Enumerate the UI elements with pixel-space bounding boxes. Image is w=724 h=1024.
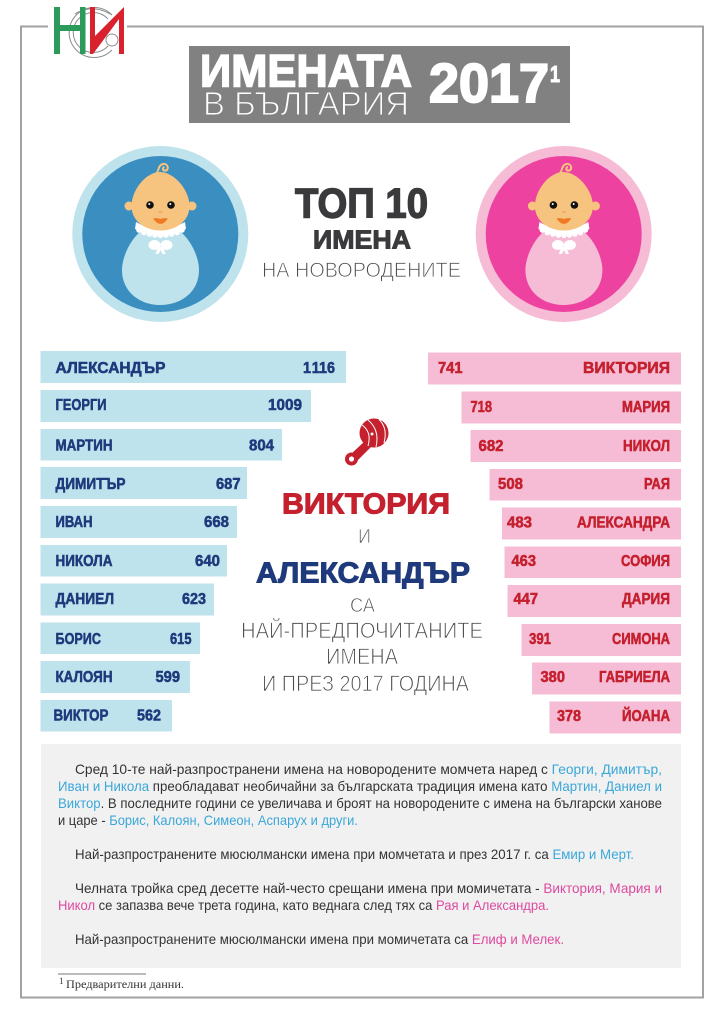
bar chart: girls: 718 <box>470 399 492 416</box>
bar chart: girls: ЙОАНА <box>622 707 670 725</box>
callout: most preferred names: ИМЕНА <box>326 644 398 669</box>
bar chart: girls: МАРИЯ <box>622 399 670 416</box>
bar chart: boys: АЛЕКСАНДЪР <box>56 360 166 377</box>
bar chart: girls: 741 <box>438 360 463 377</box>
bar chart: boys: КАЛОЯН <box>56 669 112 686</box>
bar chart: girls: ГАБРИЕЛА <box>599 669 670 686</box>
bar chart: boys: 668 <box>204 514 229 531</box>
bar chart: boys: ГЕОРГИ <box>56 397 106 414</box>
bar chart: boys: 804 <box>249 438 274 454</box>
callout: most preferred names <box>241 488 483 696</box>
paragraph: girls names: Никол се запазва вече трета година, като веднага след тях са Рая и Александра. <box>58 897 549 913</box>
bar chart: boys: ДАНИЕЛ <box>56 591 114 608</box>
bar chart: girls <box>428 352 681 734</box>
callout: most preferred names: СА <box>350 595 376 617</box>
icon: baby boy <box>72 146 248 322</box>
bar chart: boys: ВИКТОР <box>54 708 108 724</box>
bar chart: boys: ИВАН <box>56 514 92 531</box>
bar chart: boys: 615 <box>170 631 192 648</box>
title banner: В БЪЛГАРИЯ <box>203 85 409 122</box>
icon: rattle <box>345 418 388 466</box>
bar chart: girls: ДАРИЯ <box>622 591 670 608</box>
bar chart: boys: МАРТИН <box>56 438 112 454</box>
bar chart: boys: 562 <box>137 708 161 724</box>
heading: top 10 names: ИМЕНА <box>313 224 411 254</box>
text panel <box>41 744 681 968</box>
bar chart: girls: 463 <box>512 553 536 570</box>
callout: most preferred names: ВИКТОРИЯ <box>282 488 450 520</box>
bar chart: girls: НИКОЛ <box>623 438 670 455</box>
paragraph: girls names: Челната тройка сред десетте най-често срещани имена при момичетата - Виктория, Мария и <box>75 880 662 896</box>
bar chart: girls: 380 <box>540 669 565 686</box>
bar chart: boys: 1009 <box>268 397 302 414</box>
bar chart: boys: 599 <box>156 669 180 686</box>
bar chart: girls: РАЯ <box>644 476 670 493</box>
bar chart: girls: 391 <box>529 631 551 648</box>
bar chart: girls: 483 <box>507 514 532 532</box>
heading: top 10 names <box>262 180 461 282</box>
footnote <box>58 974 184 991</box>
footnote: 1 <box>59 976 64 986</box>
paragraph: boys names: Иван и Никола преобладават необичайни за българската традиция имена като Мартин, Даниел и <box>58 778 662 794</box>
title banner: ИМЕНАТА <box>200 46 412 96</box>
bar chart: girls: 508 <box>498 476 523 493</box>
bar chart: girls: 378 <box>557 708 581 725</box>
bar chart: boys: БОРИС <box>56 631 101 648</box>
callout: most preferred names: И <box>358 526 371 548</box>
heading: top 10 names: НА НОВОРОДЕНИТЕ <box>262 259 461 282</box>
paragraph: muslim girls names: Най-разпространените мюсюлмански имена при момичетата са Елиф и Мелек. <box>75 931 564 947</box>
bar chart: girls: 447 <box>514 591 538 608</box>
paragraph: boys names: и царе - Борис, Калоян, Симеон, Аспарух и други. <box>58 812 358 828</box>
footnote: Предварителни данни. <box>66 979 184 991</box>
callout: most preferred names: И ПРЕЗ 2017 ГОДИНА <box>262 671 469 696</box>
logo <box>54 7 124 58</box>
bar chart: girls: СОФИЯ <box>621 553 670 570</box>
paragraph: boys names: Сред 10-те най-разпространени имена на новородените момчета наред с Георги, Димитър, <box>75 761 662 777</box>
bar chart: girls: 682 <box>478 438 504 455</box>
bar chart: girls: СИМОНА <box>612 631 670 648</box>
bar chart: boys: 687 <box>216 476 240 493</box>
bar chart: boys <box>40 351 346 732</box>
bar chart: boys: 623 <box>182 591 206 608</box>
bar chart: boys: 1 116 <box>303 360 335 377</box>
paragraph: boys names: Виктор. В последните години се увеличава и броят на новородените с имена на български ханове <box>58 795 662 811</box>
paragraph: girls names <box>58 880 662 913</box>
title banner: 2017 <box>429 52 549 114</box>
callout: most preferred names: АЛЕКСАНДЪР <box>256 558 470 590</box>
title banner <box>189 46 570 123</box>
title banner: 1 <box>550 61 560 87</box>
bar chart: girls: АЛЕКСАНДРА <box>577 514 670 532</box>
bar chart: boys: ДИМИТЪР <box>56 476 126 493</box>
bar chart: girls: ВИКТОРИЯ <box>583 360 670 377</box>
icon: baby girl <box>476 146 652 322</box>
bar chart: boys: НИКОЛА <box>56 553 112 570</box>
bar chart: boys: 640 <box>195 553 220 570</box>
heading: top 10 names: ТОП 10 <box>295 180 428 226</box>
callout: most preferred names: НАЙ-ПРЕДПОЧИТАНИТЕ <box>241 618 483 643</box>
paragraph: boys names <box>58 761 662 828</box>
paragraph: muslim boys names: Най-разпространените мюсюлмански имена при момчетата и през 2017 г. са Емир и Мерт. <box>75 846 634 862</box>
